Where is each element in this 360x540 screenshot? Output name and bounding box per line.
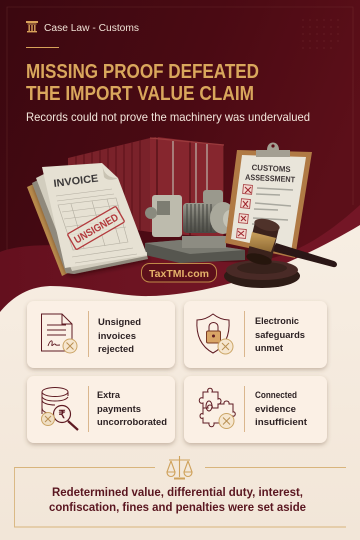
clipboard heading xyxy=(245,163,295,184)
icon: coins with magnifier and cross xyxy=(42,388,78,430)
conclusion text: confiscation, fines and penalties were set aside xyxy=(49,500,306,514)
title xyxy=(26,61,259,105)
card label: Unsigned xyxy=(98,317,141,328)
illustration: invoice stack xyxy=(27,163,148,276)
background: lighter maroon wave xyxy=(0,205,360,320)
icon: shield with padlock and cross xyxy=(197,314,233,354)
card label xyxy=(98,317,141,355)
card label: Extra xyxy=(97,390,121,401)
gold rule xyxy=(26,47,59,48)
subtitle: Records could not prove the machinery was undervalued xyxy=(26,110,310,124)
background: cream lower section xyxy=(0,225,360,540)
website badge xyxy=(142,264,216,282)
conclusion text xyxy=(49,485,306,514)
background: maroon header xyxy=(0,0,360,320)
category label: Case Law - Customs xyxy=(44,23,139,34)
illustration: shipping container xyxy=(68,137,224,238)
card label: evidence xyxy=(255,404,296,415)
card label: uncorroborated xyxy=(97,417,167,428)
card label: payments xyxy=(97,404,141,415)
card label: safeguards xyxy=(255,330,305,341)
icon: scales of justice xyxy=(167,456,192,478)
card label: Connected xyxy=(255,390,297,401)
card: extra payments xyxy=(27,376,175,443)
icon: signed document with cross xyxy=(42,314,77,353)
card: electronic safeguards xyxy=(184,301,327,368)
illustration: gavel xyxy=(224,217,337,288)
header frame line xyxy=(7,7,353,250)
dot pattern xyxy=(302,19,339,49)
card label: Electronic xyxy=(255,316,299,327)
stamp: unsigned: UNSIGNED xyxy=(72,211,121,246)
title: THE IMPORT VALUE CLAIM xyxy=(26,83,254,105)
icon: coins with magnifier and cross: ₹ xyxy=(58,409,66,421)
card label xyxy=(97,390,167,428)
clipboard heading: ASSESSMENT xyxy=(245,173,295,184)
icon: puzzle pieces with cross xyxy=(199,388,235,428)
card label: unmet xyxy=(255,343,284,354)
card: connected evidence xyxy=(184,376,327,443)
card: unsigned invoices xyxy=(27,301,175,368)
title: MISSING PROOF DEFEATED xyxy=(26,61,259,83)
card label xyxy=(255,390,308,428)
card label xyxy=(255,316,305,354)
card label: insufficient xyxy=(255,417,308,428)
illustration: customs clipboard xyxy=(225,142,312,258)
icon: court pillar xyxy=(26,21,38,32)
website badge: TaxTMI.com xyxy=(149,268,209,280)
illustration: motor on base xyxy=(145,190,245,263)
card label: invoices xyxy=(98,331,136,342)
card label: rejected xyxy=(98,344,134,355)
clipboard heading: CUSTOMS xyxy=(251,163,291,174)
invoice heading: INVOICE xyxy=(53,173,99,190)
conclusion text: Redetermined value, differential duty, interest, xyxy=(52,485,303,499)
conclusion box frame xyxy=(14,468,346,527)
